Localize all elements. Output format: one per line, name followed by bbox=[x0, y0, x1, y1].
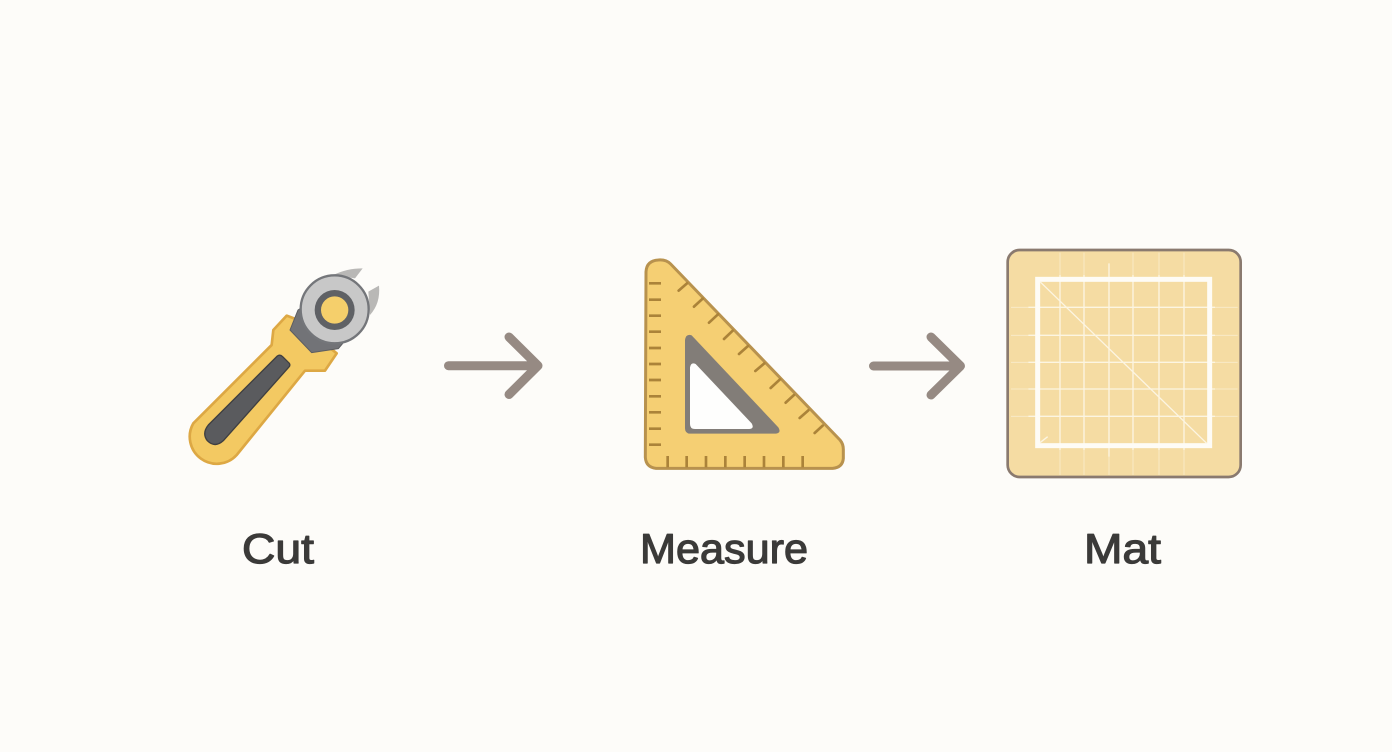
triangle cutout bbox=[685, 335, 780, 434]
label: Measure: Measure bbox=[640, 525, 808, 572]
cutter wheel bbox=[301, 275, 369, 343]
arrow: cut to measure bbox=[448, 337, 538, 394]
label: Mat: Mat bbox=[1084, 525, 1161, 572]
diagonal ruler ticks bbox=[679, 283, 823, 433]
icon: measuring triangle bbox=[645, 260, 843, 468]
left ruler ticks bbox=[649, 283, 661, 445]
label: Cut: Cut bbox=[242, 525, 314, 572]
icon: rotary cutter bbox=[190, 268, 379, 464]
cutter handle bbox=[190, 316, 337, 464]
bottom ruler ticks bbox=[668, 456, 803, 467]
icon: cutting mat bbox=[1008, 250, 1241, 477]
arrow: measure to mat bbox=[874, 337, 960, 395]
white square frame bbox=[1038, 279, 1210, 446]
blade tips bbox=[333, 268, 379, 315]
diagonal line bbox=[1040, 282, 1207, 443]
wheel bracket bbox=[290, 293, 357, 353]
handle grip bbox=[205, 355, 290, 444]
faint outer grid bbox=[1011, 253, 1238, 475]
inner grid bbox=[1028, 263, 1215, 457]
triangle body bbox=[645, 260, 843, 468]
mat board bbox=[1008, 250, 1241, 477]
